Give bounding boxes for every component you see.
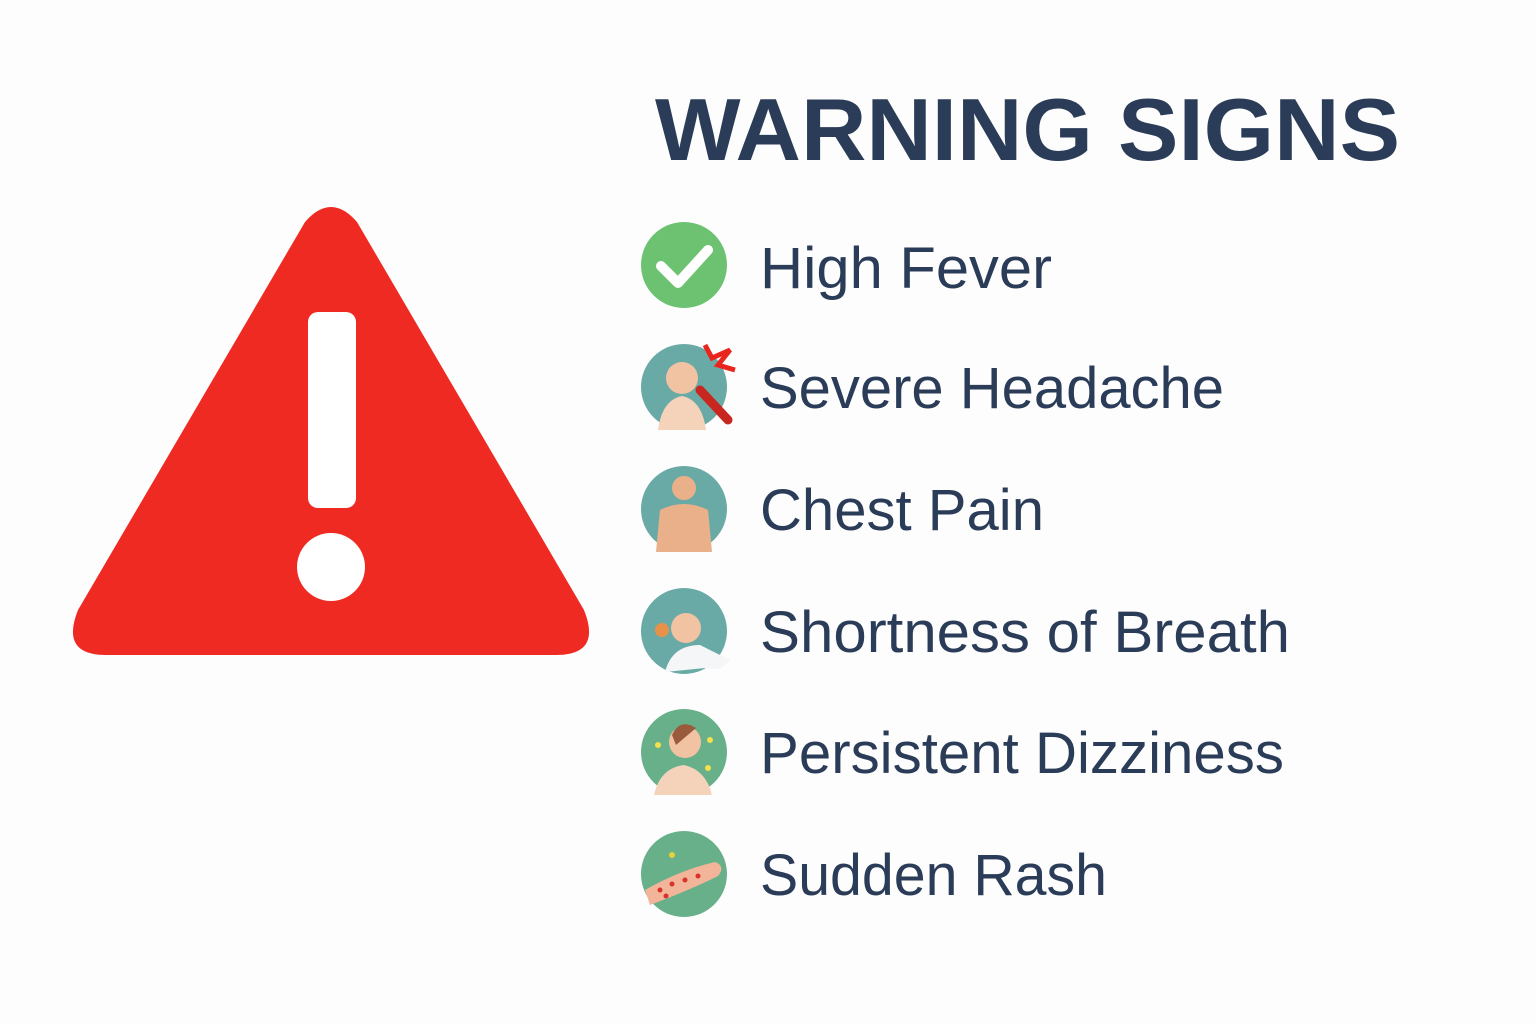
icon: chest bbox=[641, 466, 727, 552]
item: shortness of breath bbox=[641, 588, 1290, 674]
icon: rash bbox=[641, 831, 727, 917]
item: persistent dizziness: Persistent Dizziness bbox=[760, 721, 1284, 786]
item: sudden rash: Sudden Rash bbox=[760, 843, 1107, 908]
icon: breath bbox=[641, 588, 730, 674]
item: high fever bbox=[641, 222, 1052, 308]
icon: dizziness bbox=[641, 709, 727, 795]
item: chest pain: Chest Pain bbox=[760, 478, 1044, 543]
exclamation dot bbox=[297, 533, 365, 601]
icon: warning triangle bbox=[73, 207, 589, 655]
item: high fever: High Fever bbox=[760, 236, 1052, 301]
exclamation bar bbox=[308, 312, 356, 508]
item: shortness of breath: Shortness of Breath bbox=[760, 600, 1290, 665]
title: WARNING SIGNS bbox=[655, 80, 1400, 179]
icon: check bbox=[641, 222, 727, 308]
item: severe headache bbox=[641, 344, 1224, 430]
item: persistent dizziness bbox=[641, 709, 1284, 795]
icon: headache bbox=[641, 344, 735, 430]
item: chest pain bbox=[641, 466, 1044, 552]
item: sudden rash bbox=[641, 831, 1107, 917]
item: severe headache: Severe Headache bbox=[760, 356, 1224, 421]
